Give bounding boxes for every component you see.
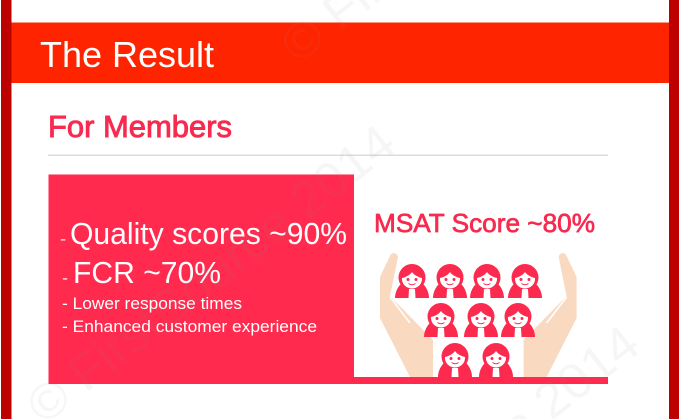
icon group: members — [395, 264, 542, 377]
icon: right hand — [524, 253, 577, 377]
left border bar — [1, 0, 12, 419]
heading divider — [48, 154, 608, 156]
right border bar — [669, 0, 679, 419]
metric: FCR: - — [62, 270, 68, 287]
bullet: enhanced customer experience: - Enhanced customer experience — [62, 317, 317, 336]
title: The Result — [40, 34, 214, 75]
metric: FCR: FCR ~70% — [73, 255, 221, 290]
header band — [12, 22, 669, 83]
bullet: lower response times: - Lower response times — [62, 294, 242, 313]
heading: for members: For Members — [48, 109, 232, 144]
metric: quality scores: Quality scores ~90% — [70, 216, 347, 251]
icon: left hand — [380, 253, 433, 377]
panel: metrics — [48, 174, 354, 384]
baseline bar — [354, 377, 608, 384]
metric: quality scores: - — [60, 231, 66, 248]
heading: MSAT score: MSAT Score ~80% — [374, 208, 595, 238]
